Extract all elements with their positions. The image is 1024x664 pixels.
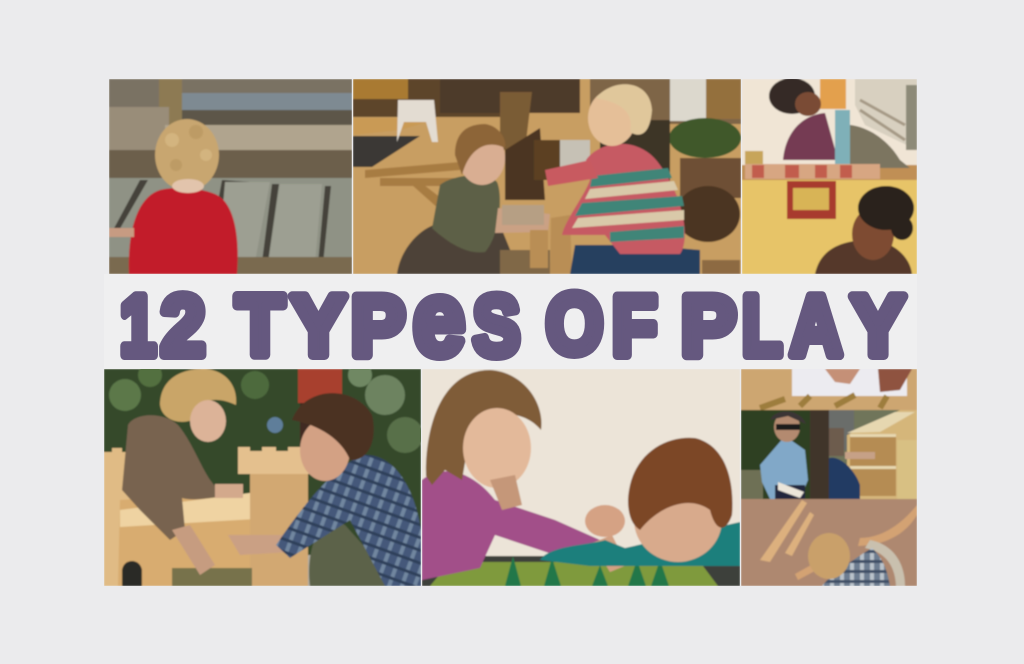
- title: 12 Types of Play: 2: [161, 279, 205, 374]
- photo: boy stacking letter blocks above boy at yellow wall: [742, 78, 917, 274]
- panel: child with wooden tracks: [741, 499, 917, 586]
- title: 12 Types of Play: F: [612, 279, 657, 374]
- title: 12 Types of Play: e: [413, 260, 465, 378]
- title: 12 Types of Play: O: [546, 277, 603, 372]
- title: 12 Types of Play: Y: [851, 279, 905, 374]
- photo: girl and boy playing a forest board game: [422, 369, 740, 586]
- panel: drawing table with crayons: [741, 369, 917, 410]
- title: 12 Types of Play: P: [681, 279, 736, 374]
- panel: child at wooden dollhouse: [829, 410, 917, 499]
- photo: child in red shirt at wooden bench: [109, 79, 352, 274]
- title: 12 Types of Play: [120, 260, 905, 378]
- title: 12 Types of Play: A: [790, 279, 842, 374]
- title: 12 Types of Play: L: [742, 279, 782, 374]
- panel: pirate boy costume: [741, 410, 829, 499]
- title: 12 Types of Play: P: [351, 279, 405, 374]
- photo: collage of drawing table, pirate boy, dollhouse and wooden tracks: [741, 369, 917, 586]
- title: 12 Types of Play: T: [236, 279, 284, 374]
- title: 12 Types of Play: S: [473, 279, 520, 374]
- photo: two boys playing with wooden castle: [104, 363, 423, 586]
- title: 12 Types of Play: 1: [120, 279, 156, 374]
- photo: two toddlers building with wooden blocks: [353, 79, 741, 274]
- title: 12 Types of Play: Y: [291, 279, 346, 374]
